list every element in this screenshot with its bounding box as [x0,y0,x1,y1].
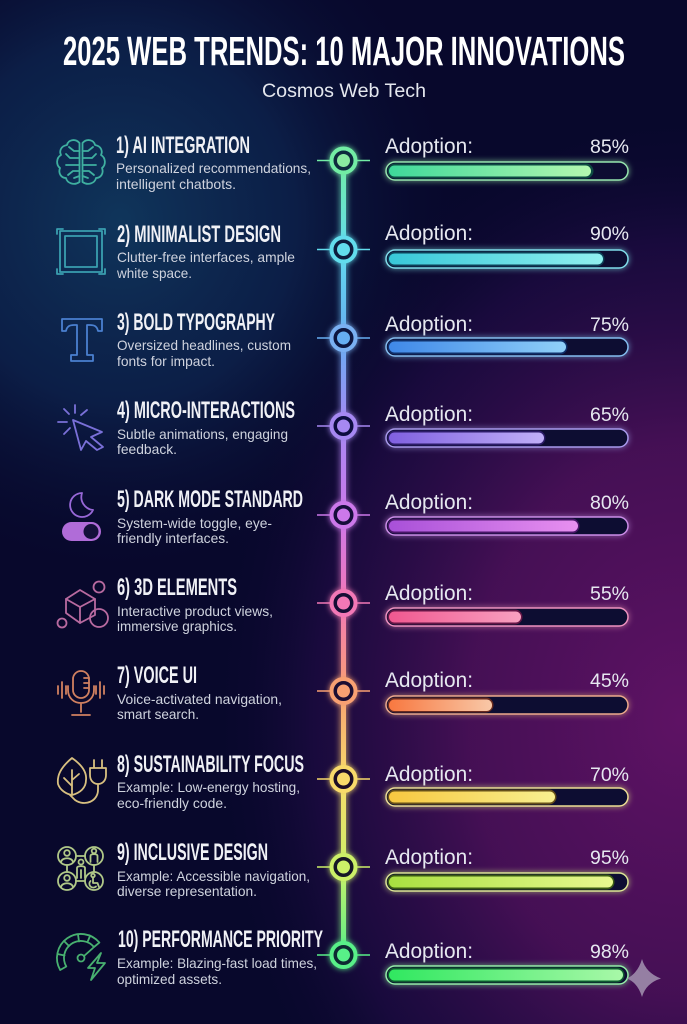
percentage: 90% [590,223,629,245]
node 10 [317,943,370,967]
progress bar [386,608,628,626]
progress bar [386,162,628,180]
adoption label: Adoption: [385,135,473,158]
icon: speedometer with bolt [57,934,105,980]
description [117,426,288,457]
node 4 [317,414,370,438]
node 1 [317,148,370,172]
description: Clutter-free interfaces, ample [117,249,295,265]
heading: 1) AI INTEGRATION [116,132,250,159]
percentage: 55% [590,583,629,605]
heading: 9) INCLUSIVE DESIGN [117,839,268,866]
percentage: 70% [590,764,629,786]
description: optimized assets. [117,971,222,987]
row 7: voice UI [58,662,629,722]
progress bar [386,788,628,806]
percentage: 65% [590,404,629,426]
row 3: bold typography [62,309,629,369]
adoption label: Adoption: [385,846,473,869]
description [117,515,272,546]
description: Oversized headlines, custom [117,337,291,353]
row 10: performance priority [57,926,629,987]
description: Interactive product views, [117,603,273,619]
row 6: 3D elements [58,574,629,634]
heading: 5) DARK MODE STANDARD [117,486,303,513]
icon: cursor click [58,405,103,450]
percentage: 85% [590,136,629,158]
row 5: dark mode standard [62,486,629,546]
adoption label: Adoption: [385,763,473,786]
description: friendly interfaces. [117,530,229,546]
adoption label: Adoption: [385,313,473,336]
heading: 10) PERFORMANCE PRIORITY [118,926,323,953]
description [117,691,282,722]
icon: leaf and plug [58,758,106,803]
progress bar [386,873,628,891]
subtitle: Cosmos Web Tech [262,81,426,102]
node 6 [317,591,370,615]
adoption label: Adoption: [385,582,473,605]
node 5 [317,503,370,527]
adoption label: Adoption: [385,222,473,245]
icon: cube and spheres [58,582,108,628]
description: Example: Low-energy hosting, [117,779,300,795]
description: diverse representation. [117,883,257,899]
row 9: inclusive design [58,839,629,899]
description: System-wide toggle, eye- [117,515,272,531]
description: Personalized recommendations, [116,160,311,176]
description: white space. [116,265,192,281]
node 9 [317,855,370,879]
description [117,337,291,369]
icon: serif T [62,319,102,361]
description [116,160,311,192]
icon: brain [57,140,105,184]
icon: microphone [58,671,104,715]
node 2 [317,238,370,262]
description: immersive graphics. [117,618,237,634]
heading: 2) MINIMALIST DESIGN [117,221,281,248]
description [116,249,295,281]
description [117,955,317,987]
heading: 8) SUSTAINABILITY FOCUS [117,751,304,778]
description: feedback. [117,441,177,457]
percentage: 75% [590,314,629,336]
description: Voice-activated navigation, [117,691,282,707]
row 8: sustainability focus [58,751,629,811]
progress bar [386,696,628,714]
heading: 6) 3D ELEMENTS [117,574,237,601]
adoption label: Adoption: [385,403,473,426]
progress bar [386,338,628,356]
row 2: minimalist design [57,221,629,281]
node 3 [317,326,370,350]
adoption label: Adoption: [385,669,473,692]
percentage: 80% [590,492,629,514]
progress bar [386,429,628,447]
description: Subtle animations, engaging [117,426,288,442]
progress bar [386,250,628,268]
row 4: micro-interactions [58,397,629,457]
percentage: 95% [590,847,629,869]
progress bar [386,517,628,535]
description: Example: Accessible navigation, [117,868,310,884]
icon: connected people [58,847,103,890]
heading: 4) MICRO-INTERACTIONS [117,397,295,424]
description [117,868,310,899]
adoption label: Adoption: [385,940,473,963]
description: intelligent chatbots. [116,176,236,192]
timeline [317,148,370,967]
heading: 3) BOLD TYPOGRAPHY [117,309,275,336]
adoption label: Adoption: [385,491,473,514]
description: Example: Blazing-fast load times, [117,955,317,971]
row 1: AI integration [57,132,629,192]
icon: nested squares [57,229,105,274]
node 8 [317,767,370,791]
description: fonts for impact. [117,353,215,369]
description: smart search. [117,706,199,722]
icon: sparkle watermark [627,959,661,997]
progress bar [386,966,628,984]
description [117,603,273,634]
description: eco-friendly code. [117,795,227,811]
description [117,779,300,811]
percentage: 45% [590,670,629,692]
percentage: 98% [590,941,629,963]
icon: moon and toggle [62,493,101,541]
heading: 7) VOICE UI [117,662,197,689]
node 7 [317,679,370,703]
